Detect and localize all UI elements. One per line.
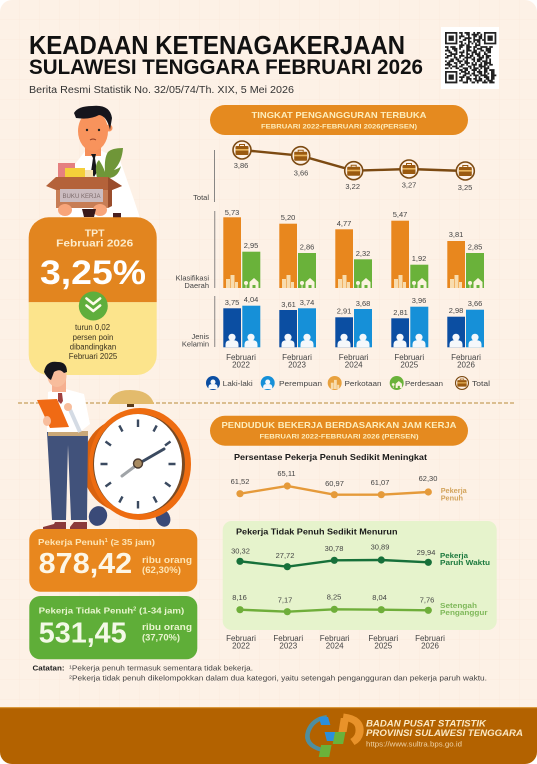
chart: pekerja paruh waktu line — [231, 542, 490, 570]
card: pekerja tidak penuh: Pekerja Tidak Penuh — [39, 606, 122, 616]
chart: pekerja paruh waktu line: 30,78 — [325, 544, 343, 553]
text: TPT label: TPT — [85, 228, 105, 240]
chart: klasifikasi daerah bars: 2,95 — [244, 241, 258, 250]
chart: pekerja penuh line — [231, 469, 468, 502]
text: period: Februari 2026 — [56, 238, 133, 250]
chart: klasifikasi daerah bars: 3,81 — [449, 230, 463, 239]
chart: jenis kelamin bars — [182, 295, 484, 348]
panel: pekerja tidak penuh — [223, 521, 497, 630]
card: pekerja tidak penuh: 531,45 — [39, 618, 127, 650]
icon: down chevrons — [79, 292, 108, 320]
text: change description — [69, 323, 118, 361]
subtitle: Berita Resmi Statistik No. 32/05/74/Th. XIX, 5 Mei 2026 — [29, 85, 294, 96]
axis labels: years lower: 2026 — [421, 642, 439, 650]
chart: pekerja paruh waktu line: 27,72 — [276, 551, 294, 560]
icon: BPS logo — [307, 717, 360, 757]
chart: klasifikasi daerah bars: 2,85 — [468, 242, 482, 252]
axis labels: years: 2022 — [232, 360, 250, 370]
chart: jenis kelamin bars: Jenis — [191, 332, 209, 341]
text: change description: Februari 2025 — [69, 352, 118, 361]
title — [29, 32, 423, 79]
axis labels: years: Februari — [226, 353, 256, 362]
card: pekerja penuh: (62,30%) — [142, 565, 181, 575]
axis labels: years lower: Februari — [320, 634, 350, 643]
card: pekerja penuh: 878,42 — [39, 548, 132, 580]
chart: jenis kelamin bars: 3,66 — [468, 299, 482, 308]
heading: Tingkat Pengangguran Terbuka: TINGKAT PENGANGGURAN TERBUKA — [252, 110, 426, 120]
chart: pekerja penuh line: Penuh — [441, 494, 463, 502]
text: TPT value: 3,25% — [40, 254, 146, 292]
footer agency name: PROVINSI SULAWESI TENGGARA — [366, 728, 523, 738]
chart: klasifikasi daerah bars: 5,20 — [281, 213, 295, 222]
chart: total TPT line — [193, 141, 474, 202]
chart: klasifikasi daerah bars: 4,77 — [337, 219, 351, 228]
chart: total TPT line: 3,25 — [458, 183, 472, 192]
axis labels: years: 2026 — [457, 360, 475, 370]
chart: klasifikasi daerah bars: 1,92 — [412, 254, 426, 263]
axis labels: years lower: Februari — [368, 634, 398, 643]
chart: pekerja paruh waktu line: 30,89 — [371, 542, 389, 552]
chart: total TPT line: 3,22 — [345, 182, 360, 191]
chart: pekerja penuh line: 60,97 — [325, 479, 344, 488]
illustration: man with clipboard — [37, 362, 90, 529]
chart: pekerja penuh line: 65,11 — [277, 469, 296, 478]
axis labels: years lower — [226, 634, 445, 650]
chart: setengah penganggur line: 8,25 — [327, 592, 341, 602]
card: pekerja tidak penuh: (37,70%) — [142, 632, 180, 642]
chart: pekerja paruh waktu line: Paruh Waktu — [440, 558, 490, 567]
chart: klasifikasi daerah bars: Daerah — [184, 281, 209, 290]
card: pekerja penuh: ribu orang — [142, 555, 192, 565]
heading: Penduduk Bekerja — [210, 416, 468, 446]
chart: setengah penganggur line — [232, 592, 488, 617]
text: change description: persen poin — [73, 333, 113, 342]
chart: pekerja penuh line: 61,52 — [231, 477, 249, 486]
axis labels: years lower: Februari — [273, 634, 303, 643]
legend: Laki-laki — [223, 379, 253, 388]
chart: setengah penganggur line: 8,04 — [372, 593, 387, 602]
axis labels: years: 2024 — [345, 360, 363, 370]
heading: Tingkat Pengangguran Terbuka: FEBRUARI 2022-FEBRUARI 2026(PERSEN) — [261, 124, 417, 130]
axis labels: years lower: Februari — [415, 634, 445, 643]
title: SULAWESI TENGGARA FEBRUARI 2026 — [29, 56, 423, 79]
icon: QR code — [441, 27, 499, 89]
footnotes: Pekerja tidak penuh dikelompokkan dalam dua kategori, yaitu setengah pengangguran dan pekerja paruh waktu. — [72, 676, 487, 683]
chart: pekerja penuh line: Pekerja — [441, 486, 468, 495]
chart: klasifikasi daerah bars: 5,47 — [393, 210, 407, 219]
heading: Penduduk Bekerja: FEBRUARI 2022-FEBRUARI 2026 (PERSEN) — [260, 434, 418, 441]
chart: pekerja paruh waktu line: 29,94 — [417, 548, 435, 557]
chart: setengah penganggur line: 7,17 — [278, 596, 292, 604]
legend: Perdesaan — [405, 379, 443, 388]
card: pekerja penuh: (≥ 35 jam) — [108, 537, 155, 547]
chart: jenis kelamin bars: 2,98 — [449, 306, 463, 315]
title: KEADAAN KETENAGAKERJAAN — [29, 32, 405, 60]
footer agency name — [366, 719, 523, 738]
footnotes: 1 — [69, 665, 73, 670]
footnotes: Catatan: — [32, 666, 64, 673]
chart: setengah penganggur line: 7,76 — [420, 596, 434, 604]
footer agency name: BADAN PUSAT STATISTIK — [366, 719, 487, 729]
footnotes — [32, 665, 487, 683]
axis labels: years lower: 2022 — [232, 642, 250, 650]
illustration: worker carrying box — [46, 106, 140, 218]
chart: pekerja penuh line: 61,07 — [371, 478, 389, 487]
text: change description: dibandingkan — [70, 342, 116, 352]
axis labels: years: 2025 — [400, 360, 419, 370]
chart: total TPT line: Total — [193, 193, 209, 202]
illustration: worker carrying box: BUKU KERJA — [62, 194, 100, 200]
axis labels: years lower: 2024 — [326, 642, 344, 650]
chart: setengah penganggur line: Setengah — [440, 601, 477, 610]
panel: TPT Februari 2026 — [29, 217, 157, 375]
card: pekerja penuh: 1 — [105, 538, 108, 544]
chart: pekerja penuh line: 62,30 — [419, 474, 437, 483]
chart: total TPT line: 3,66 — [294, 168, 308, 178]
axis labels: years — [226, 353, 481, 370]
axis labels: years lower: 2025 — [374, 642, 393, 650]
card: pekerja penuh: Pekerja Penuh — [38, 537, 97, 547]
chart: setengah penganggur line: 8,16 — [232, 593, 247, 602]
axis labels: years: Februari — [451, 353, 481, 362]
card: pekerja tidak penuh: 2 — [133, 607, 137, 613]
chart: klasifikasi daerah bars — [176, 208, 484, 290]
chart: jenis kelamin bars: Kelamin — [182, 340, 209, 348]
chart: jenis kelamin bars: 3,74 — [300, 298, 314, 307]
card: pekerja tidak penuh — [29, 596, 197, 659]
chart: total TPT line: 3,27 — [402, 180, 416, 190]
card: pekerja penuh — [29, 529, 197, 592]
footnotes: Pekerja penuh termasuk sementara tidak bekerja. — [72, 666, 253, 673]
chart: jenis kelamin bars: 4,04 — [244, 295, 258, 304]
heading: Tingkat Pengangguran Terbuka — [210, 105, 468, 135]
chart: jenis kelamin bars: 2,81 — [393, 308, 408, 317]
legend: Perkotaan — [344, 379, 382, 388]
chart: klasifikasi daerah bars: Klasifikasi — [176, 274, 209, 282]
footer band — [0, 707, 537, 764]
footnotes: 2 — [69, 675, 73, 680]
chart: total TPT line: 3,86 — [234, 161, 248, 170]
text: change description: turun 0,02 — [75, 323, 110, 332]
axis labels: years lower: 2023 — [279, 642, 298, 650]
axis labels: years: Februari — [282, 353, 312, 362]
axis labels: years: Februari — [339, 353, 369, 362]
chart: klasifikasi daerah bars: 2,32 — [356, 249, 370, 258]
footer website: https://www.sultra.bps.go.id — [366, 742, 462, 749]
chart: jenis kelamin bars: 3,61 — [281, 300, 296, 309]
chart: jenis kelamin bars: 3,75 — [225, 298, 239, 307]
axis labels: years: 2023 — [288, 360, 306, 370]
axis labels: years: Februari — [394, 353, 424, 362]
chart title: pekerja penuh: Persentase Pekerja Penuh Sedikit Meningkat — [234, 452, 427, 462]
card: pekerja tidak penuh: ribu orang — [142, 622, 192, 632]
chart: pekerja paruh waktu line: 30,32 — [231, 546, 250, 556]
chart: pekerja paruh waktu line: Pekerja — [440, 551, 469, 560]
legend: Total — [472, 379, 490, 388]
chart: jenis kelamin bars: 2,91 — [337, 306, 351, 316]
illustration: alarm clock — [82, 390, 191, 529]
axis labels: years lower: Februari — [226, 634, 256, 643]
chart: jenis kelamin bars: 3,96 — [412, 296, 426, 305]
chart: jenis kelamin bars: 3,68 — [356, 299, 370, 308]
chart: klasifikasi daerah bars: 5,73 — [225, 208, 239, 217]
chart: klasifikasi daerah bars: 2,86 — [300, 242, 314, 252]
heading: Penduduk Bekerja: PENDUDUK BEKERJA BERDASARKAN JAM KERJA — [222, 420, 456, 430]
chart: setengah penganggur line: Penganggur — [440, 608, 488, 617]
chart title: tidak penuh: Pekerja Tidak Penuh Sedikit Menurun — [236, 526, 398, 536]
card: pekerja tidak penuh: (1-34 jam) — [136, 606, 184, 616]
legend — [206, 376, 490, 390]
legend: Perempuan — [279, 379, 322, 388]
